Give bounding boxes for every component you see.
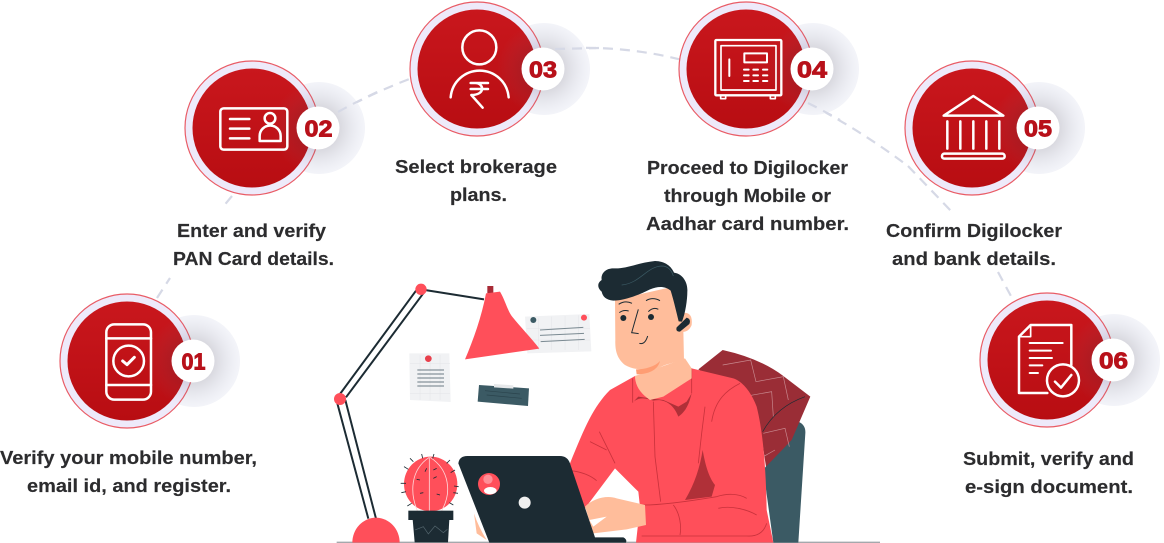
floor line bbox=[337, 540, 880, 543]
step 06 text: e-sign document. bbox=[965, 477, 1133, 497]
icon: phone with check bbox=[106, 324, 151, 400]
number 02: 02 bbox=[304, 116, 332, 142]
icon: document with check bbox=[1019, 325, 1079, 396]
step 04 text bbox=[646, 158, 849, 234]
icon: person with rupee bbox=[451, 30, 509, 108]
step 02 text bbox=[173, 221, 334, 269]
step 04 text: Proceed to Digilocker bbox=[647, 158, 848, 178]
step 05 text bbox=[886, 221, 1062, 269]
step 01 text: email id, and register. bbox=[27, 476, 231, 496]
note: pinned top right bbox=[525, 314, 591, 353]
dashed connector arc bbox=[157, 48, 1012, 298]
note: grid paper bbox=[409, 353, 451, 402]
number 03: 03 bbox=[529, 56, 557, 82]
desk lamp bbox=[334, 284, 539, 543]
step 03 text: plans. bbox=[450, 185, 507, 205]
number 01: 01 bbox=[182, 348, 206, 374]
step 02 badge bbox=[185, 61, 379, 195]
step 04 text: Aadhar card number. bbox=[646, 214, 849, 234]
step 03 text bbox=[395, 157, 557, 205]
illustration: man working at laptop bbox=[334, 261, 880, 543]
laptop bbox=[458, 456, 626, 543]
step 02 text: PAN Card details. bbox=[173, 249, 334, 269]
step 01 text: Verify your mobile number, bbox=[0, 448, 257, 468]
number 05: 05 bbox=[1024, 116, 1052, 142]
step 06 text: Submit, verify and bbox=[963, 449, 1134, 469]
step 04 text: through Mobile or bbox=[664, 186, 831, 206]
step 04 badge bbox=[679, 2, 859, 136]
step 03 badge bbox=[410, 2, 600, 136]
step 05 badge bbox=[905, 61, 1085, 195]
man torso and arms bbox=[568, 368, 773, 543]
icon: PAN card bbox=[220, 108, 287, 150]
hand on keyboard bbox=[474, 497, 646, 540]
icon: safe bbox=[715, 40, 781, 99]
step 01 text bbox=[0, 448, 257, 496]
step 02 text: Enter and verify bbox=[177, 221, 326, 241]
step 05 text: Confirm Digilocker bbox=[886, 221, 1062, 241]
icon: bank bbox=[942, 96, 1005, 159]
note: dark card bbox=[478, 384, 529, 406]
number 06: 06 bbox=[1099, 348, 1128, 374]
cactus in pot bbox=[401, 454, 459, 542]
step 06 text bbox=[963, 449, 1134, 497]
man head bbox=[598, 261, 692, 400]
step 05 text: and bank details. bbox=[892, 249, 1056, 269]
chair and cushion bbox=[698, 350, 810, 543]
step 01 badge bbox=[60, 294, 240, 428]
step 03 text: Select brokerage bbox=[395, 157, 557, 177]
number 04: 04 bbox=[797, 56, 827, 82]
step 06 badge bbox=[980, 293, 1160, 427]
